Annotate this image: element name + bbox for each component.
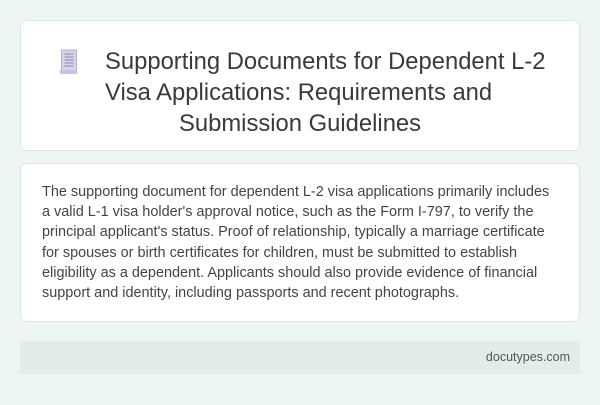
title <box>105 48 546 137</box>
description text: eligibility as a dependent. Applicants should also provide evidence of financial <box>42 265 537 281</box>
footer source: docutypes.com <box>486 350 570 364</box>
title: Visa Applications: Requirements and <box>105 79 492 106</box>
description text <box>42 184 549 301</box>
description text: principal applicant's status. Proof of relationship, typically a marriage certificate <box>42 224 545 240</box>
body text card <box>20 163 580 322</box>
title: Supporting Documents for Dependent L-2 <box>105 48 546 75</box>
title: Submission Guidelines <box>179 110 421 137</box>
description text: for spouses or birth certificates for children, must be submitted to establish <box>42 245 517 261</box>
description text: a valid L-1 visa holder's approval notice, such as the Form I-797, to verify the <box>42 204 533 220</box>
icon: document <box>60 50 78 74</box>
description text: The supporting document for dependent L-2 visa applications primarily includes <box>42 184 549 200</box>
header card <box>20 20 580 151</box>
description text: support and identity, including passports and recent photographs. <box>42 285 459 301</box>
footer <box>20 341 580 374</box>
